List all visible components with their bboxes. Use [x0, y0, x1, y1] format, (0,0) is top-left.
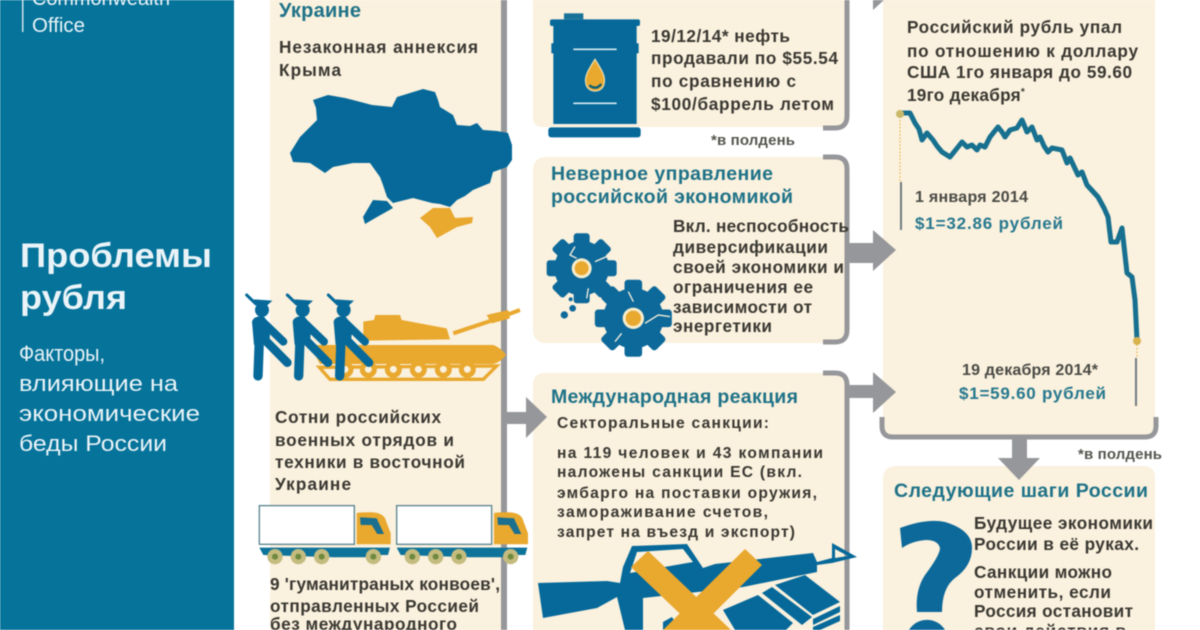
text: failure to diversify: своей экономики и — [673, 257, 844, 277]
panel: oil price — [533, 0, 847, 137]
footnote: at noon: *в полдень — [711, 132, 795, 149]
callout: 1 January 2014: 1 января 2014 — [915, 189, 1028, 206]
icon: oil barrel — [548, 13, 641, 137]
heading: international reaction: Международная реакция — [551, 386, 798, 408]
text: oil price comparison: $100/баррель летом — [651, 94, 834, 114]
title — [20, 237, 212, 317]
text: failure to diversify: энергетики — [673, 316, 772, 336]
text: failure to diversify: ограничения ее — [673, 277, 813, 297]
text: annexation of Crimea: Крыма — [279, 60, 341, 80]
subtitle: экономические — [19, 401, 200, 426]
heading: mismanagement: российской экономикой — [551, 186, 793, 208]
text: annexation of Crimea — [279, 37, 478, 80]
callout: 1 January 2014: $1=32.86 рублей — [915, 214, 1063, 233]
panel: rouble fall — [882, 0, 1156, 437]
subtitle — [19, 341, 200, 456]
text: annexation of Crimea: Незаконная аннексия — [279, 37, 478, 57]
text: rouble summary: 19го декабря — [907, 85, 1021, 105]
text: failure to diversify: Вкл. неспособность — [673, 216, 849, 236]
icon: convoy trucks — [259, 506, 528, 564]
callout: 1 January 2014 — [915, 189, 1063, 233]
arrow: rouble to next steps — [998, 438, 1040, 480]
text: future of the economy: отменить, если — [974, 582, 1111, 602]
text: Russian troops: Сотни российских — [275, 407, 441, 427]
text: sanctions: эмбарго на поставки оружия, — [557, 485, 817, 502]
text: rouble summary: США 1го января до 59.60 — [907, 62, 1132, 82]
heading: next steps: Следующие шаги России — [894, 480, 1148, 502]
subtitle: Факторы, — [19, 341, 105, 366]
subtitle: беды России — [19, 431, 167, 456]
map: Ukraine with Crimea highlighted — [290, 89, 512, 238]
icon: rifle — [538, 543, 857, 630]
heading: mismanagement: Неверное управление — [551, 163, 773, 185]
text: sanctions — [557, 415, 823, 541]
text: oil price comparison — [651, 26, 838, 114]
icon: soldiers — [247, 295, 369, 376]
text: sanctions: Секторальные санкции: — [557, 415, 769, 432]
text: rouble summary — [907, 17, 1138, 105]
text: humanitarian convoys: 9 'гуманитраных конвоев', — [270, 574, 500, 594]
title: рубля — [20, 279, 127, 317]
text: failure to diversify — [673, 216, 849, 336]
panel: international reaction — [533, 373, 857, 630]
icon: gold cross — [631, 549, 762, 630]
text: sanctions: замораживание счетов, — [557, 504, 768, 521]
arrow: Ukraine to international reaction — [505, 397, 547, 438]
text: Russian troops: техники в восточной — [275, 452, 465, 472]
text: humanitarian convoys — [270, 574, 500, 630]
text: future of the economy: России в её руках. — [974, 534, 1139, 554]
icon: tank — [310, 310, 520, 379]
text: Russian troops: военных отрядов и — [275, 430, 454, 450]
text: oil price comparison: по сравнению с — [651, 71, 796, 91]
callout: 19 December 2014 — [959, 362, 1106, 403]
text: failure to diversify: зависимости от — [673, 297, 812, 317]
text: sanctions: на 119 человек и 43 компании — [557, 445, 823, 462]
logo: Foreign & Commonwealth Office: Office — [32, 15, 85, 37]
text: future of the economy — [974, 513, 1153, 630]
footnote: at noon (rouble): *в полдень — [1078, 446, 1162, 463]
arrow: reaction to rouble — [849, 372, 896, 413]
callout: 19 December 2014: 19 декабря 2014* — [962, 362, 1099, 379]
arrow: top feed into rouble — [873, 0, 884, 10]
panel: Russia's next steps — [883, 466, 1155, 630]
logo: Foreign & Commonwealth Office — [22, 0, 170, 37]
text: sanctions: наложены санкции ЕС (вкл. — [557, 464, 802, 481]
text: humanitarian convoys: отправленных Россией — [270, 596, 479, 616]
subtitle: влияющие на — [19, 371, 179, 396]
heading: Ukraine: Украине — [279, 0, 361, 22]
callout: 19 December 2014: $1=59.60 рублей — [959, 384, 1106, 403]
text: rouble summary: по отношению к доллару — [907, 41, 1138, 61]
text: oil price comparison: продавали по $55.54 — [651, 48, 838, 68]
heading: mismanagement — [551, 163, 793, 208]
icon: broken gears — [547, 233, 672, 357]
text: failure to diversify: диверсификации — [673, 237, 828, 257]
arrow: mismanagement to rouble — [849, 230, 896, 271]
icon: banknote stacks — [663, 575, 840, 630]
icon: question mark — [900, 521, 972, 630]
panel: left title sidebar — [0, 0, 234, 630]
text: future of the economy: Будущее экономики — [974, 513, 1153, 533]
panel: Ukraine — [247, 0, 528, 630]
text: rouble summary: * — [1021, 87, 1025, 98]
text: sanctions: запрет на въезд и экспорт) — [557, 524, 795, 541]
panel: economic mismanagement — [533, 157, 849, 357]
title: Проблемы — [20, 237, 212, 275]
text: rouble summary: Российский рубль упал — [907, 17, 1122, 37]
text: Russian troops: Украине — [275, 474, 351, 494]
line chart: rouble rate in 2014 — [896, 110, 1141, 406]
text: oil price comparison: 19/12/14* нефть — [651, 26, 790, 46]
text: future of the economy: Санкции можно — [974, 562, 1112, 582]
text: Russian troops — [275, 407, 465, 494]
text: future of the economy: Россия остановит — [974, 601, 1133, 621]
